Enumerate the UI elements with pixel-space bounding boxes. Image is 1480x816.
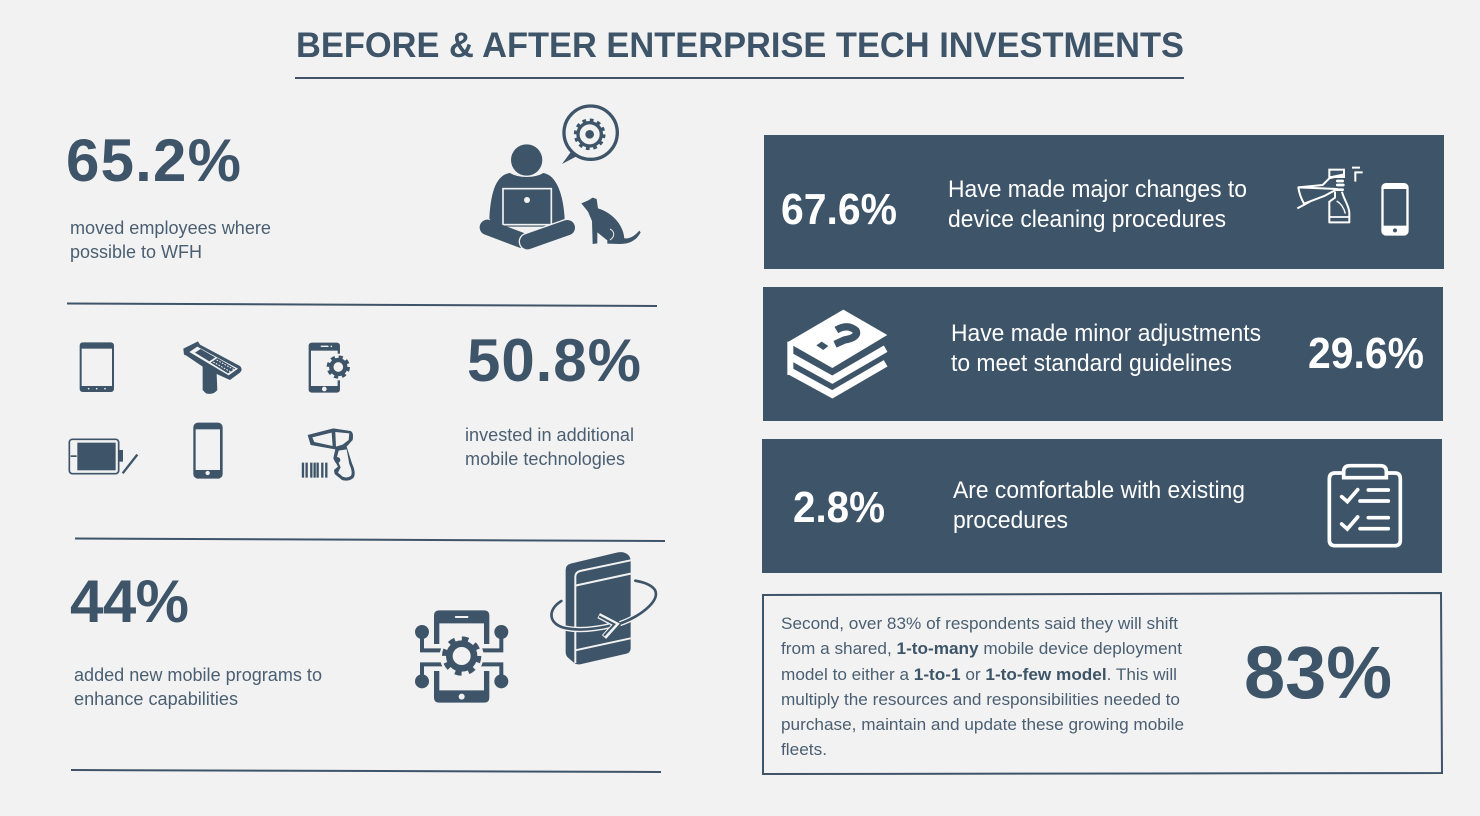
icon: drawing tablet with pen [69,439,137,474]
icon: tablet [80,342,114,392]
stat: 50.8% mobile technologies: mobile technologies [465,449,625,469]
panel: major changes [764,135,1444,269]
icon: barcode scanner [303,428,355,481]
callout stat: 83% [1244,631,1392,714]
stat: 50.8% mobile technologies [465,327,641,469]
stat: 65.2% moved to WFH: moved employees where [70,218,271,238]
stat: 44% new mobile programs: 44% [70,568,189,635]
stat: 44% new mobile programs: enhance capabilities [74,689,238,709]
callout text: multiply the resources and responsibilities needed to [781,690,1180,709]
callout text [781,614,1184,759]
icon: phone with gear [309,343,352,393]
icons: mobile devices grid [69,341,355,481]
icon: phone circuit with gear [415,610,508,703]
callout text: model to either a 1-to-1 or 1-to-few model. This will [781,665,1177,684]
callout: 83% shift to 1-to-1 [763,593,1442,774]
callout text: purchase, maintain and update these growing mobile [781,715,1184,734]
callout text: from a shared, 1-to-many mobile device deployment [781,639,1182,658]
stat: 65.2% moved to WFH: possible to WFH [70,242,202,262]
icons: mobile programs [415,552,656,703]
icon: stack of papers with question mark [787,310,887,394]
callout text: fleets. [781,740,827,759]
panel: comfortable: 2.8% [793,483,885,532]
stat: 65.2% moved to WFH: 65.2% [66,127,241,194]
stat: 50.8% mobile technologies: 50.8% [467,327,641,394]
panel: minor adjustments [763,287,1443,421]
icon: person working on laptop with cat [487,106,641,244]
callout text: Second, over 83% of respondents said they will shift [781,614,1178,633]
panel: minor adjustments: Have made minor adjustments [951,320,1261,347]
panel: comfortable: Are comfortable with existing [953,477,1245,504]
icon: spray bottle and phone [1297,168,1409,236]
stat: 44% new mobile programs [70,568,322,709]
title: BEFORE & AFTER ENTERPRISE TECH INVESTMENTS [296,26,1184,65]
icon: clipboard checklist [1329,466,1400,546]
icon: rotating tablet [551,552,656,664]
stat: 44% new mobile programs: added new mobile programs to [74,665,322,685]
panel: minor adjustments: to meet standard guidelines [951,350,1232,377]
panel: comfortable: procedures [953,507,1068,534]
stat: 65.2% moved to WFH [66,127,271,262]
panel: major changes: device cleaning procedures [948,206,1226,233]
panel: minor adjustments: 29.6% [1308,329,1424,378]
panel: major changes: Have made major changes to [948,176,1247,203]
icon: smartphone [193,423,223,479]
icon: handheld scanner [183,341,242,394]
panel: comfortable [762,439,1442,573]
panel: major changes: 67.6% [781,185,897,234]
stat: 50.8% mobile technologies: invested in additional [465,425,634,445]
